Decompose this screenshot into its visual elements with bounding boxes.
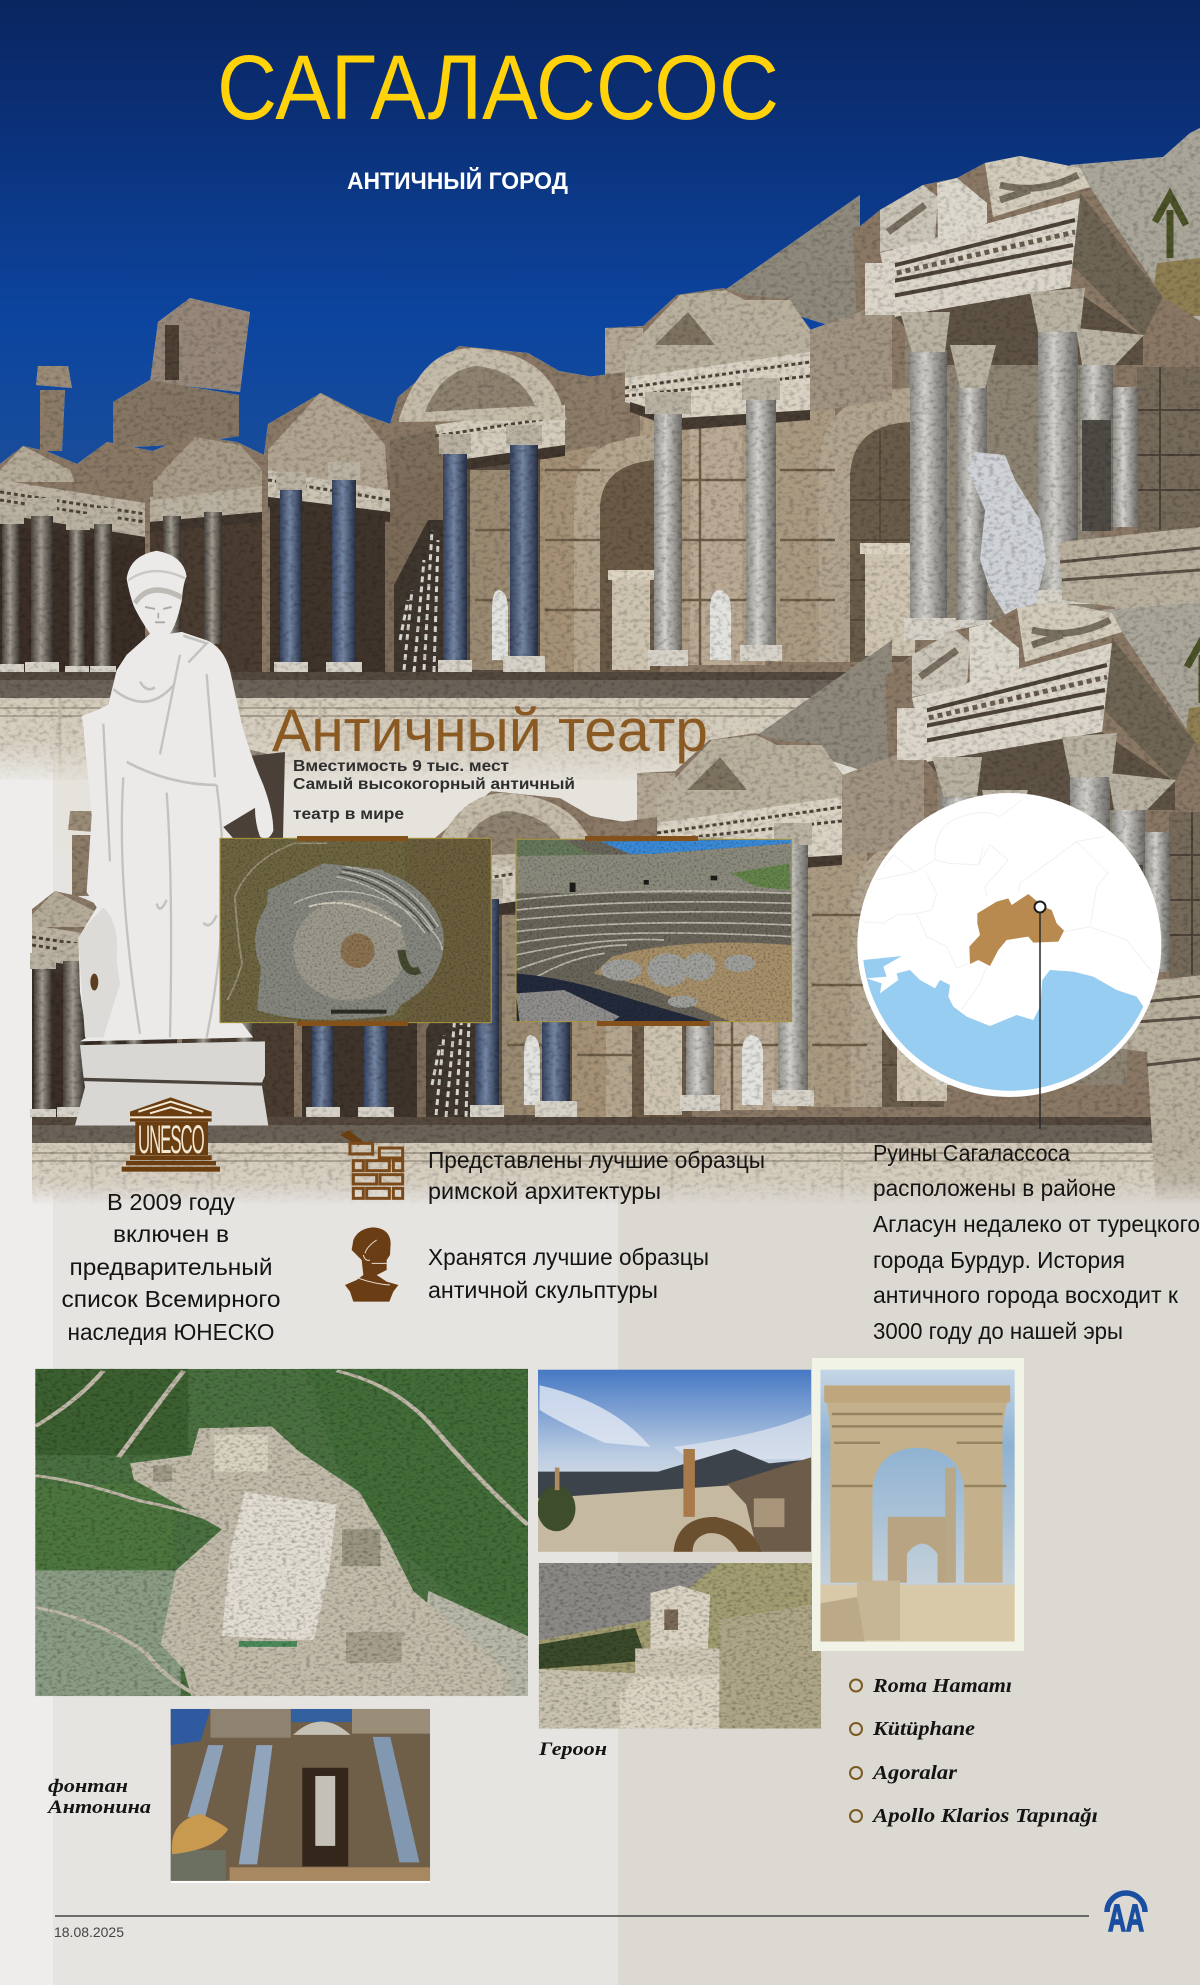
sky (0, 0, 1200, 520)
location description text: города Бурдур. История (873, 1247, 1125, 1273)
bulleted list of monuments (850, 1675, 1098, 1827)
bulleted list of monuments: Agoralar (871, 1762, 957, 1784)
caption: fountain (47, 1776, 152, 1818)
caption: fountain: Антонина (47, 1797, 152, 1818)
photo: heroon monument (539, 1563, 821, 1729)
statue of goddess on pedestal (75, 551, 273, 1126)
title: САГАЛАССОС (217, 37, 779, 139)
ruins photo: repeated facade fading into the paper (30, 573, 1200, 1225)
photo: Antonine fountain (171, 1709, 430, 1883)
icon: antique bust (345, 1227, 398, 1302)
location description text: 3000 году до нашей эры (873, 1318, 1123, 1344)
theatre facts text (293, 758, 575, 823)
icon: UNESCO temple: UNESCO (138, 1118, 205, 1162)
Anadolu Agency logo (1107, 1893, 1145, 1940)
sculpture text: античной скульптуры (428, 1277, 658, 1303)
dark stone fragment behind statue arm (222, 752, 285, 838)
date: 18.08.2025 (54, 1924, 124, 1940)
Anadolu Agency logo: AA (1108, 1898, 1144, 1940)
icon: UNESCO temple (122, 1097, 220, 1172)
caption: fountain: фонтан (48, 1776, 128, 1797)
location description text: Агласун недалеко от турецкого (873, 1211, 1200, 1237)
photo: roman arch in frame (812, 1358, 1024, 1651)
UNESCO text: предварительный (70, 1254, 272, 1280)
architecture text: Представлены лучшие образцы (428, 1147, 765, 1173)
UNESCO text (62, 1189, 280, 1345)
UNESCO text: наследия ЮНЕСКО (68, 1319, 274, 1345)
caption: heroon: Героон (538, 1739, 607, 1760)
locator map: Burdur province (857, 793, 1161, 1097)
UNESCO text: включен в (113, 1221, 229, 1247)
footer rule (55, 1915, 1089, 1917)
theatre facts text: театр в мире (293, 806, 404, 823)
bulleted list of monuments: Kütüphane (872, 1718, 975, 1740)
location description text: античного города восходит к (873, 1282, 1179, 1308)
architecture text (428, 1147, 765, 1204)
architecture text: римской архитектуры (428, 1178, 661, 1204)
map pin and leader line (1034, 902, 1046, 1129)
theatre facts text: Самый высокогорный античный (293, 776, 575, 793)
photo: aerial view of the site (35, 1369, 528, 1696)
bulleted list of monuments: Apollo Klarios Tapınağı (871, 1805, 1098, 1827)
location description text: Руины Сагалассоса (873, 1140, 1070, 1166)
brown accent bars on theatre photos (297, 836, 710, 1026)
photo: columns and mountain under blue sky (537, 1370, 811, 1552)
photo: theatre seating rows (516, 839, 792, 1022)
heading: antique theatre: Античный театр (272, 697, 708, 764)
bulleted list of monuments: Roma Hamamı (872, 1675, 1012, 1697)
subtitle: АНТИЧНЫЙ ГОРОД (347, 167, 568, 195)
location description text (873, 1140, 1200, 1344)
theatre facts text: Вместимость 9 тыс. мест (293, 758, 509, 775)
UNESCO text: список Всемирного (62, 1286, 280, 1312)
icon: bricks and trowel (340, 1130, 403, 1198)
ruins photo: upper library facade (0, 128, 1200, 780)
location description text: расположены в районе (873, 1175, 1116, 1201)
UNESCO text: В 2009 году (107, 1189, 236, 1215)
sculpture text: Хранятся лучшие образцы (428, 1244, 709, 1270)
photo: theatre from above (220, 838, 491, 1023)
sculpture text (428, 1244, 709, 1303)
